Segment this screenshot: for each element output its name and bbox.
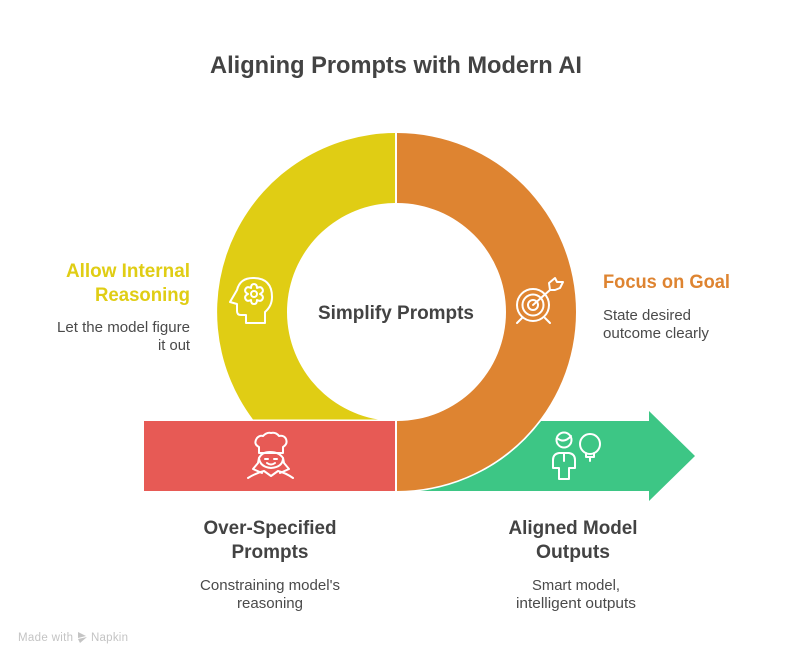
panel: focus on goal segment bbox=[397, 133, 576, 491]
text: over-specified description: reasoning bbox=[237, 596, 303, 612]
text: allow internal reasoning description: it out bbox=[158, 338, 190, 354]
text: focus on goal description: outcome clearly bbox=[603, 326, 710, 342]
icon: head with gear bbox=[230, 278, 272, 323]
heading: allow internal reasoning bbox=[66, 261, 190, 306]
heading: allow internal reasoning: Allow Internal bbox=[66, 261, 190, 282]
text: focus on goal description: State desired bbox=[603, 308, 691, 324]
panel: aligned model outputs arrow bbox=[405, 411, 695, 501]
heading: aligned model outputs: Aligned Model bbox=[508, 518, 638, 539]
text: over-specified description: Constraining model's bbox=[200, 578, 340, 594]
text: over-specified description bbox=[200, 578, 340, 612]
heading: over-specified prompts: Prompts bbox=[232, 542, 308, 563]
watermark: made with napkin bbox=[18, 632, 128, 644]
watermark: made with napkin: Made with bbox=[18, 632, 73, 644]
icon: person and lightbulb bbox=[553, 432, 600, 479]
icon: chef bbox=[248, 433, 293, 478]
heading: over-specified prompts bbox=[204, 518, 336, 563]
panel: allow internal reasoning segment bbox=[217, 133, 395, 420]
text: aligned model description: Smart model, bbox=[532, 578, 620, 594]
icon: target with arrow bbox=[517, 278, 563, 323]
heading: focus on goal: Focus on Goal bbox=[603, 272, 730, 293]
text: aligned model description: intelligent outputs bbox=[516, 596, 636, 612]
icon: napkin logo bbox=[78, 632, 87, 643]
text: allow internal reasoning description: Let the model figure bbox=[57, 320, 190, 336]
text: aligned model description bbox=[516, 578, 636, 612]
panel: over-specified prompts bar bbox=[144, 421, 395, 491]
title: Aligning Prompts with Modern AI bbox=[210, 52, 582, 79]
watermark: made with napkin: Napkin bbox=[91, 632, 128, 644]
heading: aligned model outputs: Outputs bbox=[536, 542, 610, 563]
center label: Simplify Prompts bbox=[318, 302, 474, 324]
text: focus on goal description bbox=[603, 308, 710, 342]
heading: aligned model outputs bbox=[508, 518, 638, 563]
heading: allow internal reasoning: Reasoning bbox=[95, 285, 190, 306]
text: allow internal reasoning description bbox=[57, 320, 190, 354]
heading: over-specified prompts: Over-Specified bbox=[204, 518, 336, 539]
